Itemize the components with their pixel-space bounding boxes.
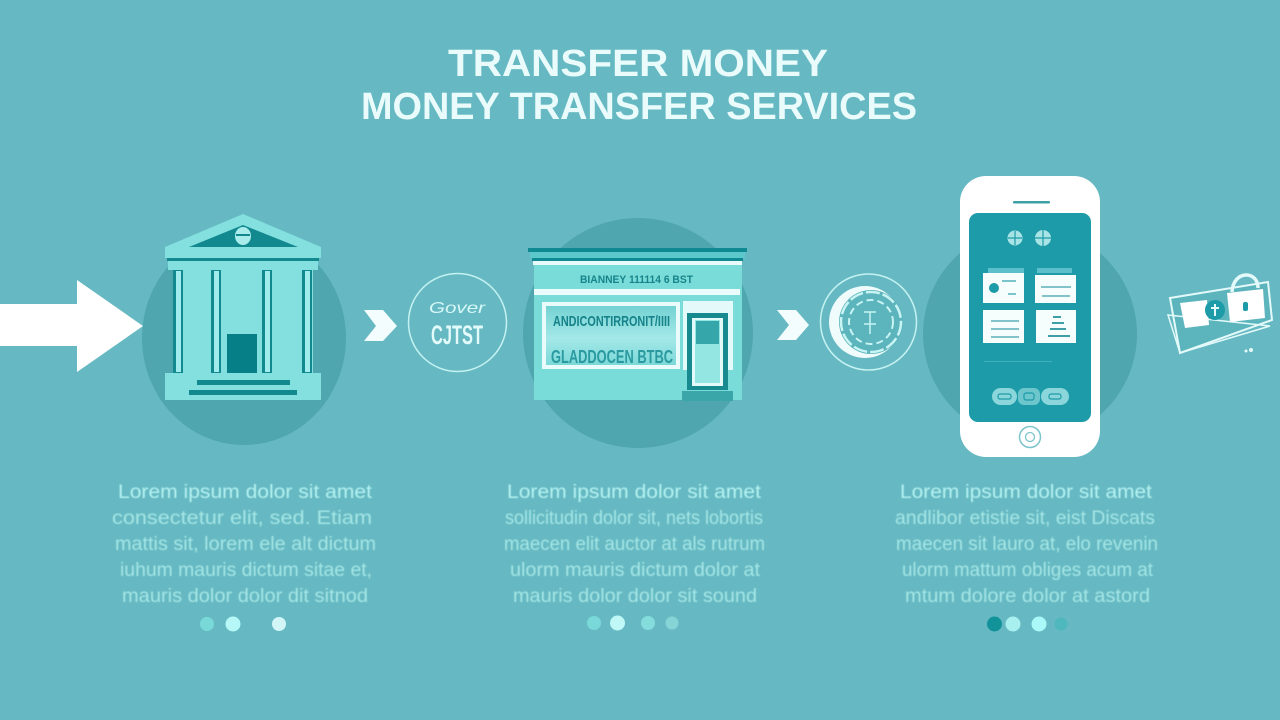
badge: cost: [408, 274, 506, 372]
title: MONEY TRANSFER SERVICES: [361, 86, 917, 128]
panel: bank: [112, 214, 376, 632]
text block: store: mauris dolor dolor sit sound: [513, 586, 757, 607]
text block: bank: consectetur elit, sed. Etiam: [112, 508, 372, 529]
arrow: chevron two: [777, 310, 809, 340]
badge: coin: [820, 274, 916, 370]
text block: bank: [112, 482, 376, 607]
panel: mobile phone: [895, 176, 1158, 632]
store backdrop circle: [523, 218, 753, 448]
text block: store: ulorm mauris dictum dolor at: [510, 560, 761, 581]
icon: bank building: [165, 214, 321, 400]
icon: storefront: GLADDOCEN BTBC: [551, 347, 673, 367]
panel: store: [504, 218, 765, 630]
phone backdrop circle: [923, 227, 1137, 441]
text block: mobile: mtum dolore dolor at astord: [905, 586, 1150, 607]
text block: store: sollicitudin dolor sit, nets lobortis: [505, 508, 763, 529]
arrow: main entry: [0, 280, 143, 372]
text block: mobile: ulorm mattum obliges acum at: [902, 560, 1154, 581]
badge: cost: Gover: [429, 300, 486, 317]
text block: bank: iuhum mauris dictum sitae et,: [120, 560, 372, 581]
bank backdrop circle: [142, 231, 346, 445]
icon: globes: [1008, 230, 1051, 246]
app buttons: [992, 388, 1069, 405]
home button: [1020, 426, 1040, 448]
text block: mobile: maecen sit lauro at, elo revenin: [896, 534, 1158, 555]
text block: mobile: Lorem ipsum dolor sit amet: [900, 482, 1153, 503]
text block: bank: Lorem ipsum dolor sit amet: [118, 482, 373, 503]
text block: store: [504, 482, 765, 607]
icon: storefront: [528, 248, 747, 401]
app cards: [983, 268, 1076, 343]
pagination dots: store: [587, 616, 678, 630]
text block: mobile: andlibor etistie sit, eist Discats: [895, 508, 1155, 529]
pagination dots: mobile: [987, 616, 1068, 632]
icon: cash and padlock: [1168, 275, 1272, 353]
text block: store: maecen elit auctor at als rutrum: [504, 534, 765, 555]
icon: storefront: BIANNEY 111114 6 BST: [580, 274, 693, 286]
pagination dots: bank: [200, 616, 286, 632]
badge: cost: CJTST: [431, 320, 483, 350]
text block: bank: mauris dolor dolor dit sitnod: [122, 586, 368, 607]
icon: storefront: ANDICONTIRRONIT/IIII: [553, 313, 670, 330]
text block: bank: mattis sit, lorem ele alt dictum: [115, 534, 376, 555]
title: [361, 43, 917, 128]
arrow: chevron one: [364, 310, 397, 341]
text block: mobile: [895, 482, 1158, 607]
icon: smartphone: [960, 176, 1100, 457]
text block: store: Lorem ipsum dolor sit amet: [507, 482, 762, 503]
title: TRANSFER MONEY: [448, 43, 828, 85]
